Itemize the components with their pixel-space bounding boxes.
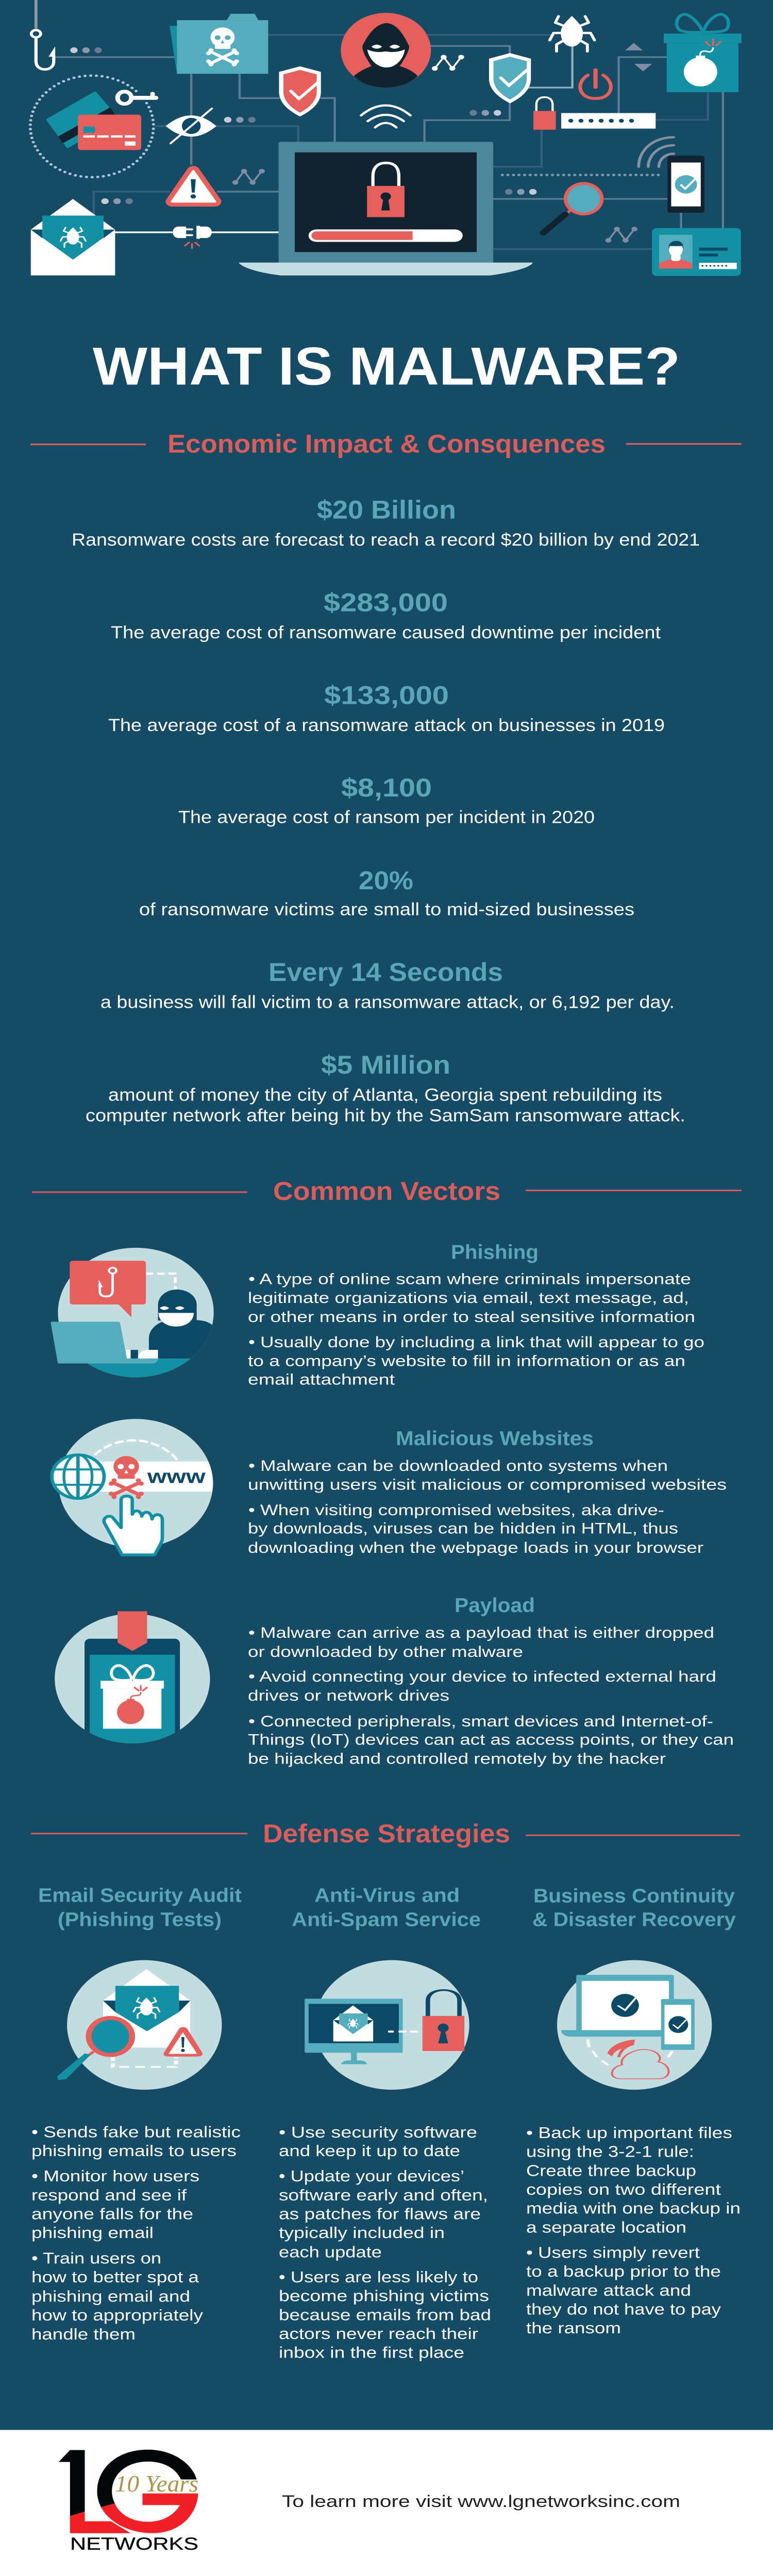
bullets: anti-virus: typically included in — [279, 2224, 445, 2242]
bullets: email security audit: phishing email and — [31, 2287, 190, 2306]
bullets: email security audit: handle them — [31, 2326, 136, 2343]
icon: power symbol — [580, 70, 611, 98]
stat: Every 14 Seconds: a business will fall victim to a ransomware attack, or 6,192 per day. — [100, 992, 675, 1012]
icon: locked laptop — [239, 142, 533, 276]
icon: teal shield — [489, 53, 531, 104]
bullets: email security audit: how to better spot a — [31, 2268, 199, 2286]
icon: zigzag graphs — [232, 55, 637, 243]
icon: warning triangle — [172, 171, 215, 201]
text block: phishing: Phishing — [451, 1241, 539, 1263]
text block: payload: • Malware can arrive as a payload that is either dropped — [248, 1624, 714, 1641]
bullets: business continuity: to a backup prior to the — [526, 2263, 721, 2280]
icon: red shield — [279, 66, 321, 116]
text block: payload: Payload — [455, 1595, 535, 1617]
icon: crossed-out eye — [165, 109, 216, 143]
column heading: business continuity: & Disaster Recovery — [532, 1908, 736, 1930]
text block: malicious websites: • Malware can be downloaded onto systems when — [248, 1458, 668, 1474]
bullets: business continuity: using the 3-2-1 rule: — [526, 2143, 694, 2161]
column heading: email security audit — [38, 1884, 242, 1930]
column heading: anti-virus: Anti-Virus and — [314, 1884, 460, 1906]
bullets: email security audit: anyone falls for the — [31, 2205, 193, 2223]
icon: wifi signal — [361, 106, 410, 127]
bullets: business continuity: the ransom — [526, 2319, 621, 2337]
text block: malicious websites — [248, 1428, 727, 1556]
stat: $20 Billion: $20 Billion — [317, 495, 456, 524]
text block: payload: Things (IoT) devices can act as access points, or they can — [248, 1731, 734, 1748]
bullets: email security audit: • Monitor how users — [31, 2167, 199, 2185]
icon: magnifying glass — [543, 182, 603, 233]
stat: 20%: 20% — [359, 866, 413, 895]
text block: phishing: • A type of online scam where criminals impersonate — [248, 1270, 691, 1287]
bullets: email security audit: phishing emails to users — [31, 2142, 237, 2160]
column heading: business continuity — [532, 1885, 736, 1930]
stat: $8,100: $8,100 — [341, 773, 432, 802]
bullets: business continuity: malware attack and — [526, 2282, 691, 2299]
icon: hooded hacker — [341, 13, 431, 88]
bullets: anti-virus: actors never reach their — [279, 2325, 478, 2343]
text block: payload: drives or network drives — [248, 1687, 449, 1704]
call to action: To learn more visit www.lgnetworksinc.com — [282, 2492, 680, 2511]
stat: $283,000 — [111, 588, 661, 642]
text block: malicious websites: unwitting users visit malicious or compromised websites — [248, 1476, 727, 1493]
connector lines — [36, 0, 723, 249]
column heading: anti-virus: Anti-Spam Service — [292, 1908, 481, 1930]
bullets: business continuity: copies on two different — [526, 2181, 721, 2198]
bullets: email security audit: • Sends fake but realistic — [31, 2123, 241, 2141]
text block: phishing: email attachment — [248, 1371, 395, 1388]
text block: phishing: legitimate organizations via email, text message, ad, — [248, 1290, 689, 1307]
stat: Every 14 Seconds: Every 14 Seconds — [268, 958, 503, 987]
icon: folder with skull — [170, 14, 268, 74]
stat: $5 Million: amount of money the city of Atlanta, Georgia spent rebuilding its — [108, 1085, 662, 1105]
logo text: NETWORKS: NETWORKS — [70, 2534, 198, 2553]
icon: email security audit — [57, 1960, 222, 2090]
text block: malicious websites: downloading when the webpage loads in your browser — [248, 1539, 703, 1556]
label: www: www — [147, 1465, 206, 1487]
title: WHAT IS MALWARE? — [93, 336, 680, 396]
stat: $133,000: $133,000 — [324, 681, 449, 710]
text block: payload: be hijacked and controlled remotely by the hacker — [248, 1750, 666, 1767]
icon: payload gift bomb on phone — [55, 1612, 210, 1748]
text block: phishing: to a company’s website to fill in information or as an — [248, 1352, 685, 1369]
stat: 20% — [139, 866, 634, 919]
stat: $283,000: The average cost of ransomware caused downtime per incident — [111, 622, 661, 642]
bullets: anti-virus: as patches for flaws are — [279, 2205, 481, 2223]
text block: phishing — [248, 1241, 704, 1388]
bullets: email security audit: respond and see if — [31, 2187, 187, 2204]
stat: $20 Billion: Ransomware costs are forecast to reach a record $20 billion by end 2021 — [72, 530, 700, 549]
bullets: anti-virus — [279, 2124, 491, 2362]
footer panel — [0, 2430, 773, 2576]
bullets: email security audit: • Train users on — [31, 2249, 161, 2267]
icon: up and down arrows — [625, 43, 652, 71]
text block: malicious websites: by downloads, viruses can be hidden in HTML, thus — [248, 1520, 678, 1537]
icon: phishing hacker at laptop — [49, 1248, 222, 1380]
stat: $283,000: $283,000 — [324, 588, 448, 617]
section heading: economic impact: Economic Impact & Consquences — [167, 429, 606, 458]
bullets: email security audit — [31, 2123, 241, 2343]
text block: malicious websites: • When visiting compromised websites, aka drive- — [248, 1502, 664, 1518]
bullets: business continuity: a separate location — [526, 2218, 686, 2236]
column heading: anti-virus — [292, 1884, 481, 1930]
bullets: anti-virus: each update — [279, 2244, 382, 2261]
bullets: business continuity — [526, 2124, 741, 2337]
icon: business continuity devices and cloud — [557, 1960, 712, 2090]
stat: $133,000 — [108, 681, 665, 735]
icon: credit cards with key — [30, 76, 158, 177]
progress dots — [70, 47, 536, 204]
column heading: business continuity: Business Continuity — [533, 1885, 735, 1907]
icon: anti-virus monitor and lock — [305, 1960, 469, 2090]
stat: $133,000: The average cost of a ransomware attack on businesses in 2019 — [108, 715, 665, 735]
icon: spider bug — [550, 16, 595, 52]
stat: $5 Million: computer network after being hit by the SamSam ransomware attack. — [86, 1106, 685, 1125]
bullets: anti-virus: and keep it up to date — [279, 2142, 460, 2160]
icon: clicking hand — [104, 1496, 162, 1555]
stat: $8,100: The average cost of ransom per incident in 2020 — [178, 807, 595, 827]
bullets: business continuity: • Back up important files — [526, 2124, 732, 2142]
stat: $8,100 — [178, 773, 595, 827]
bullets: anti-virus: • Update your devices’ — [279, 2167, 464, 2185]
stat: $20 Billion — [72, 495, 700, 549]
icon: gift bomb — [664, 14, 742, 92]
text block: payload: • Avoid connecting your device to infected external hard — [248, 1668, 716, 1685]
stat: $5 Million: $5 Million — [321, 1050, 450, 1079]
bullets: anti-virus: • Use security software — [279, 2124, 477, 2141]
bullets: anti-virus: • Users are less likely to — [279, 2268, 478, 2286]
stat: $5 Million — [86, 1050, 685, 1125]
bullets: anti-virus: because emails from bad — [279, 2306, 491, 2324]
bullets: anti-virus: inbox in the first place — [279, 2344, 464, 2362]
text block: payload — [248, 1595, 734, 1767]
icon: unplugged cable — [173, 226, 212, 248]
icon: fish hook — [31, 30, 55, 70]
bullets: business continuity: media with one backup in — [526, 2200, 741, 2217]
bullets: business continuity: Create three backup — [526, 2162, 696, 2180]
icon: smartphone with check and signal — [638, 137, 704, 213]
column heading: email security audit: (Phishing Tests) — [58, 1908, 222, 1930]
icon: infected email envelope — [31, 199, 115, 276]
section heading: defense strategies: Defense Strategies — [263, 1819, 510, 1848]
logo: LG Networks — [59, 2450, 198, 2553]
banner illustration: network of cyber threats — [30, 0, 742, 276]
text block: phishing: • Usually done by including a link that will appear to go — [248, 1334, 704, 1350]
section heading: common vectors: Common Vectors — [273, 1177, 500, 1206]
bullets: anti-virus: become phishing victims — [279, 2287, 489, 2305]
text block: phishing: or other means in order to steal sensitive information — [248, 1309, 695, 1325]
logo text: 10 Years: 10 Years — [115, 2471, 198, 2497]
bullets: anti-virus: software early and often, — [279, 2187, 488, 2204]
stat: 20%: of ransomware victims are small to mid-sized businesses — [139, 900, 634, 919]
column heading: email security audit: Email Security Audit — [38, 1884, 242, 1906]
icon: padlock and password field — [533, 97, 656, 130]
bullets: business continuity: they do not have to pay — [526, 2300, 721, 2318]
bullets: business continuity: • Users simply revert — [526, 2244, 700, 2262]
bullets: email security audit: how to appropriately — [31, 2307, 203, 2324]
bullets: email security audit: phishing email — [31, 2224, 154, 2242]
stat: Every 14 Seconds — [100, 958, 675, 1012]
defense icons — [57, 1960, 712, 2090]
icon: ID card — [652, 228, 741, 276]
icon: malicious website — [52, 1419, 216, 1555]
text block: malicious websites: Malicious Websites — [396, 1428, 594, 1450]
text block: payload: or downloaded by other malware — [248, 1643, 523, 1660]
text block: payload: • Connected peripherals, smart devices and Internet-of- — [248, 1713, 713, 1730]
